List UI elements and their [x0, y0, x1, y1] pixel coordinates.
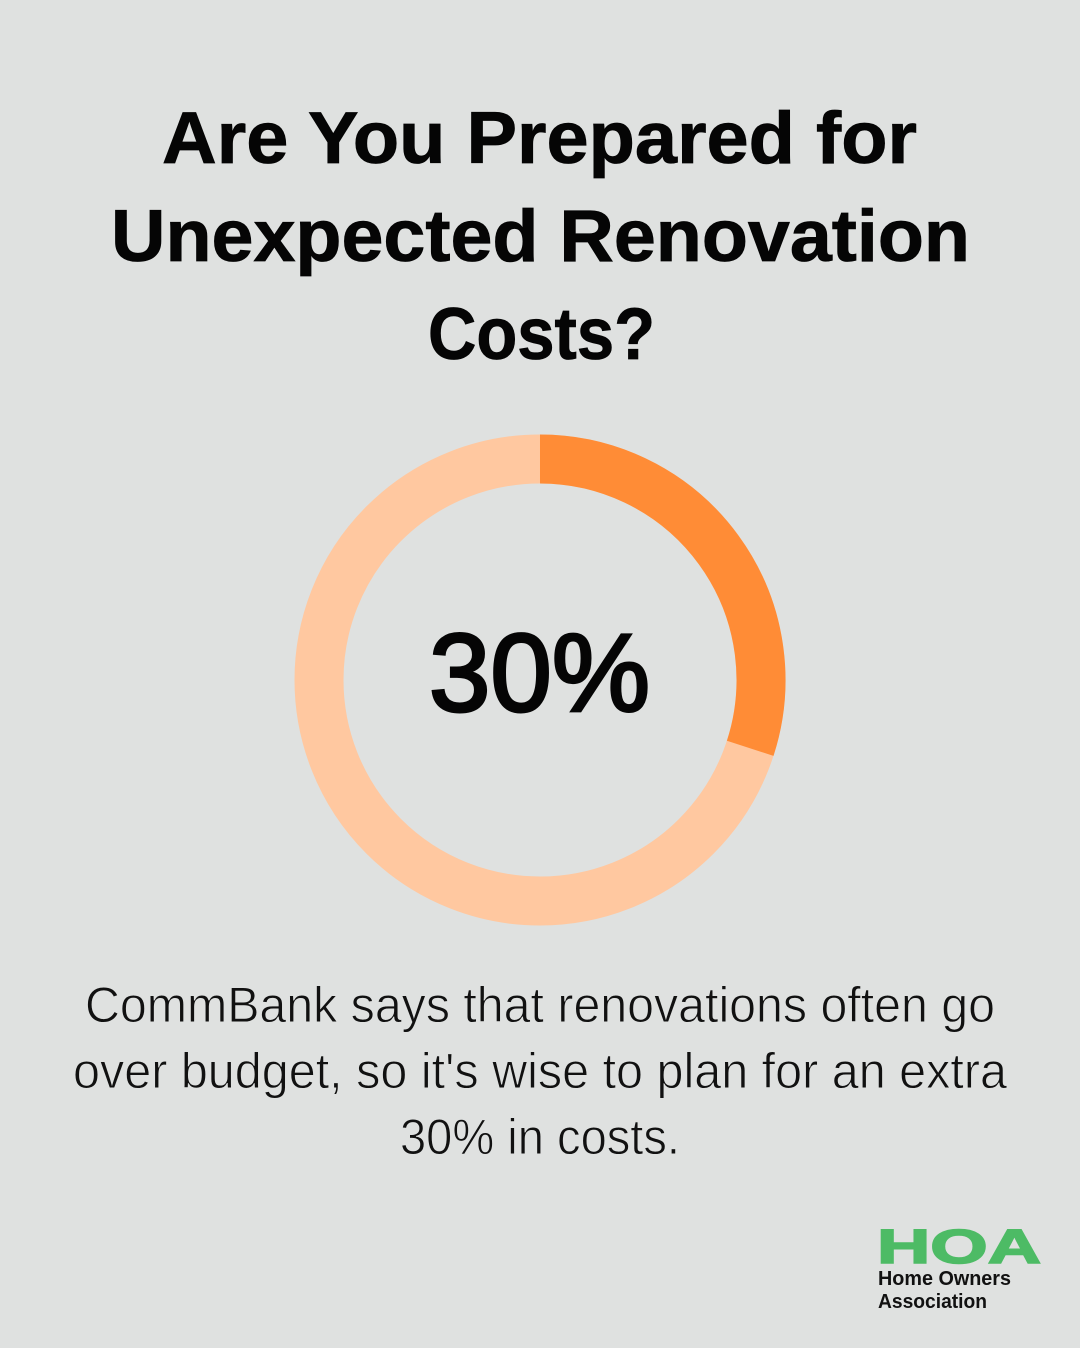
donut track: [319, 459, 761, 901]
donut chart: 30%: [319, 459, 761, 901]
logo name: [878, 1268, 1011, 1313]
donut value: 30%: [429, 612, 650, 735]
title: Are You Prepared for: [162, 98, 917, 179]
logo: Home Owners Association: [877, 1221, 1041, 1313]
description text: 30% in costs.: [400, 1109, 680, 1165]
logo name: Home Owners: [878, 1268, 1011, 1290]
logo name: Association: [878, 1291, 987, 1313]
description text: CommBank says that renovations often go: [85, 977, 995, 1033]
description text: over budget, so it's wise to plan for an extra: [73, 1043, 1007, 1099]
title: Unexpected Renovation: [111, 196, 970, 277]
logo mark: HOA: [877, 1221, 1041, 1274]
title: Costs?: [428, 294, 655, 375]
title: [111, 98, 970, 375]
donut highlighted segment: [540, 459, 761, 748]
description text: [73, 977, 1007, 1165]
